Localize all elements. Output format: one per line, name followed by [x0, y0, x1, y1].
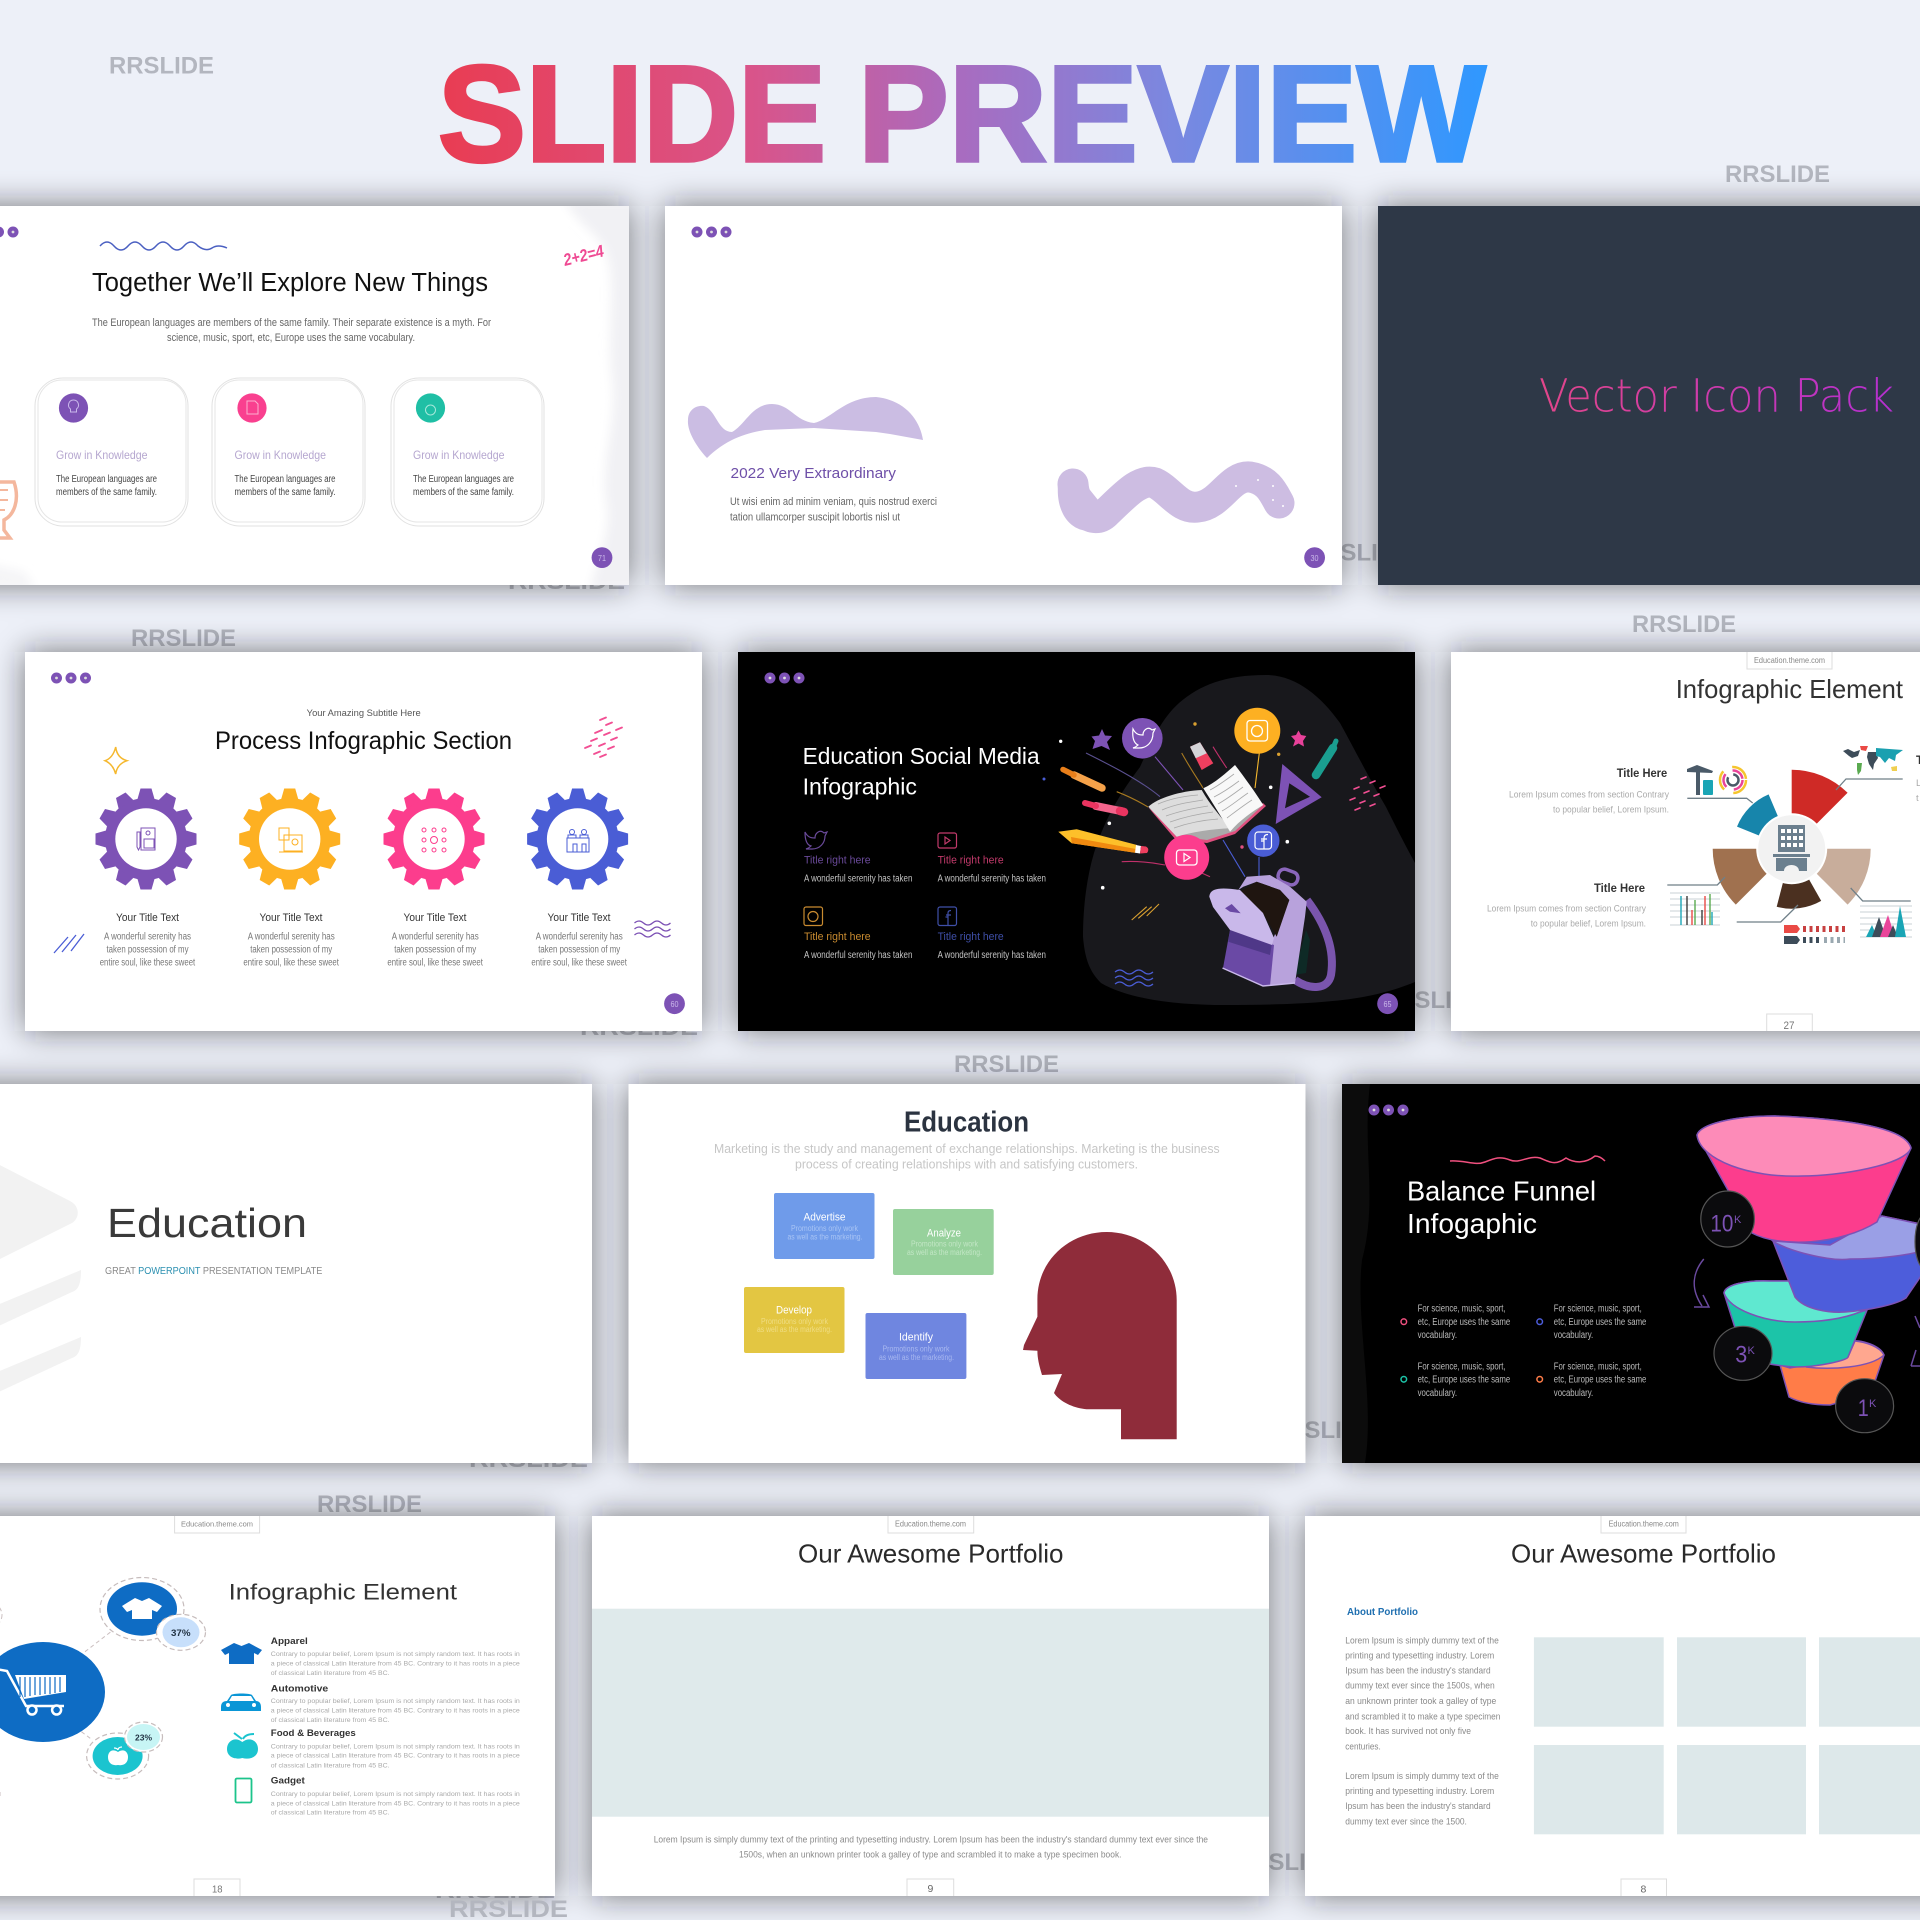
text block bottom left — [1487, 881, 1646, 930]
panel: slide Education head — [628, 1084, 1306, 1463]
text block 1: an unknown printer took a galley of type — [1345, 1696, 1496, 1707]
step 3 text: Your Title Text — [404, 912, 466, 924]
card 2: Grow in Knowledge — [234, 448, 326, 462]
row: Gadget: of classical Latin literature from 45 BC. — [271, 1810, 390, 1817]
heading: Balance Funnel — [1407, 1176, 1596, 1207]
page number: 8 — [1640, 1884, 1646, 1896]
step 1 text — [100, 912, 195, 969]
subtitle: GREAT POWERPOINT PRESENTATION TEMPLATE — [105, 1265, 322, 1277]
step 4 text — [531, 912, 627, 969]
item: youtube: A wonderful serenity has taken — [938, 874, 1046, 885]
text block top left — [1509, 766, 1669, 816]
page number — [1621, 1879, 1666, 1897]
box: Develop: as well as the marketing. — [757, 1325, 832, 1334]
step 2 text: entire soul, like these sweet — [243, 958, 339, 969]
box: Advertise — [774, 1193, 874, 1259]
list item 1: etc, Europe uses the same — [1418, 1317, 1511, 1328]
icon: social dots — [0, 226, 18, 238]
text block 1: Ipsum has been the industry's standard — [1345, 1665, 1491, 1676]
icon: building — [1773, 825, 1810, 871]
callout: 37% — [156, 1614, 206, 1650]
doodle: purple waves — [634, 921, 670, 937]
text block bottom left: to popular belief, Lorem Ipsum. — [1531, 919, 1646, 930]
item: instagram — [804, 931, 912, 961]
list item 1: For science, music, sport, — [1418, 1304, 1506, 1315]
text block 1: book. It has survived not only five — [1345, 1726, 1471, 1737]
icon: social dots — [51, 672, 91, 684]
heading: Infographic — [803, 774, 917, 800]
card 1: Grow in Knowledge — [56, 448, 148, 462]
heading: Our Awesome Portfolio — [798, 1538, 1064, 1568]
list item 1 — [1401, 1304, 1511, 1341]
item: twitter — [804, 854, 912, 885]
icon: twitter bubble — [1122, 718, 1163, 759]
row: Automotive: Contrary to popular belief, Lorem Ipsum is not simply random text. It has roots in — [271, 1698, 520, 1705]
icon: youtube bubble — [1164, 835, 1209, 880]
card 1: members of the same family. — [56, 487, 157, 498]
icon: world map — [1843, 746, 1903, 775]
text block 2: Lorem Ipsum is simply dummy text of the — [1345, 1771, 1499, 1782]
text block 1: centuries. — [1345, 1741, 1381, 1752]
wave decoration — [1450, 1156, 1605, 1163]
card 3 — [391, 378, 544, 526]
text block: science, music, sport, etc, Europe uses the same vocabulary. — [167, 332, 415, 344]
box: Develop: Promotions only work — [761, 1317, 829, 1326]
box: Analyze — [893, 1209, 994, 1275]
bubble: 3K: 3 — [1735, 1342, 1747, 1369]
row: Gadget: Gadget — [271, 1776, 305, 1786]
page number — [194, 1879, 240, 1897]
text block 2: printing and typesetting industry. Lorem — [1345, 1786, 1494, 1797]
gear: blue — [527, 788, 628, 890]
title — [438, 38, 1486, 191]
tab: Education.theme.com — [1609, 1520, 1679, 1529]
text block — [730, 496, 937, 524]
watermarks: RRSLIDE: RRSLIDE — [435, 1877, 555, 1904]
box: Analyze: Analyze — [927, 1227, 961, 1239]
bubble: 10K: 10 — [1710, 1211, 1733, 1238]
tab: Education.theme.com — [895, 1520, 966, 1529]
text block 2 — [1345, 1771, 1499, 1827]
icon: triangle ruler — [1276, 764, 1322, 824]
watermarks: RRSLIDE: RRSLIDE — [109, 52, 214, 80]
step 3 text: taken possession of my — [394, 945, 476, 956]
panel: slide Our Awesome Portfolio wide — [592, 1515, 1269, 1897]
tab — [175, 1515, 260, 1533]
page number — [664, 993, 685, 1014]
icon: pencil — [1058, 829, 1148, 854]
list item 4: For science, music, sport, — [1554, 1362, 1642, 1373]
text block bottom left: Lorem Ipsum comes from section Contrary — [1487, 904, 1646, 915]
bubble: 1K — [1836, 1379, 1894, 1433]
icon: ring — [1720, 767, 1746, 793]
text block 1: Lorem Ipsum is simply dummy text of the — [1345, 1635, 1499, 1646]
page number: 65 — [1384, 1000, 1392, 1009]
icon: head silhouette — [1023, 1232, 1177, 1439]
step 4 text: A wonderful serenity has — [536, 931, 623, 942]
step 2 text: A wonderful serenity has — [248, 931, 335, 942]
list item 2 — [1537, 1304, 1647, 1341]
page number — [1377, 993, 1398, 1014]
page number — [592, 547, 612, 568]
row: Food & Beverages: Food & Beverages — [271, 1728, 356, 1738]
item: twitter: Title right here — [804, 854, 871, 866]
icon: orange crayon — [1063, 770, 1102, 788]
arrow: left curved — [1694, 1259, 1709, 1307]
heading: Process Infographic Section — [215, 727, 512, 755]
box: Develop — [744, 1287, 844, 1353]
list item 1: vocabulary. — [1418, 1330, 1457, 1341]
step 2 text: Your Title Text — [260, 912, 322, 924]
step 3 text: entire soul, like these sweet — [387, 958, 483, 969]
box: Advertise: as well as the marketing. — [788, 1232, 862, 1241]
tab: Education.theme.com — [1754, 656, 1825, 665]
box: Identify: as well as the marketing. — [879, 1353, 954, 1362]
row: Gadget: a piece of classical Latin literature from 45 BC. Contrary to it has roots in a piece — [271, 1800, 520, 1807]
panel: slide Our Awesome Portfolio grid — [1305, 1515, 1920, 1897]
page number: 30 — [1310, 554, 1319, 563]
row: Apparel: Contrary to popular belief, Lorem Ipsum is not simply random text. It has roots in — [271, 1651, 520, 1658]
heading: Education — [904, 1107, 1029, 1139]
subtitle: Your Amazing Subtitle Here — [307, 708, 421, 718]
row: Automotive: of classical Latin literature from 45 BC. — [271, 1717, 390, 1724]
icon: cart circle — [0, 1642, 105, 1742]
item: youtube: Title right here — [938, 854, 1004, 866]
title: SLIDE — [438, 38, 826, 191]
icon: twitter outline — [805, 831, 827, 849]
step 4 text: entire soul, like these sweet — [531, 958, 627, 969]
icon: bar chart — [1670, 893, 1720, 925]
text block 1 — [1345, 1635, 1500, 1752]
step 4 text: taken possession of my — [538, 945, 620, 956]
text block: The European languages are members of the same family. Their separate existence is a myth. For — [92, 317, 491, 329]
bubble: 1K: K — [1869, 1398, 1877, 1410]
icon: people chart — [1784, 925, 1845, 944]
panel: slide Balance Funnel — [1342, 1084, 1920, 1463]
heading: 2022 Very Extraordinary — [730, 465, 897, 482]
wave decoration — [100, 242, 227, 250]
step 4 text: Your Title Text — [548, 912, 610, 924]
bubble: 10K — [1701, 1191, 1754, 1247]
list item 4: vocabulary. — [1554, 1388, 1593, 1399]
heading: Education Social Media — [803, 743, 1040, 769]
text block: process of creating relationships with and satisfying customers. — [795, 1157, 1138, 1172]
pie chart — [1713, 770, 1871, 909]
icon: facebook outline — [938, 907, 956, 926]
heading: Infographic Element — [1676, 674, 1904, 704]
row: Automotive: Automotive — [271, 1683, 328, 1693]
panel: slide 2022 Very Extraordinary — [665, 206, 1342, 585]
heading: Education — [107, 1200, 307, 1246]
page number — [907, 1879, 954, 1897]
watermarks: RRSLIDE: RRSLIDE — [1380, 987, 1485, 1014]
chevrons — [0, 1160, 81, 1396]
card 1: The European languages are — [56, 474, 157, 485]
dark blob — [1083, 675, 1415, 1005]
bubble: right, cut off — [1915, 1215, 1920, 1269]
box: Analyze: Promotions only work — [911, 1240, 979, 1249]
panel: slide Infographic Element pie — [1451, 651, 1920, 1032]
step 3 text: A wonderful serenity has — [392, 931, 479, 942]
watermarks: RRSLIDE: RRSLIDE — [317, 1491, 422, 1518]
page number: 9 — [928, 1883, 934, 1895]
list item 2: For science, music, sport, — [1554, 1304, 1642, 1315]
panel: slide Vector Icon Pack — [1378, 206, 1920, 585]
icon: teal crayon — [1316, 741, 1336, 775]
tab: Education.theme.com — [181, 1520, 253, 1529]
text block: 1500s, when an unknown printer took a galley of type and scrambled it to make a type specimen book. — [739, 1849, 1122, 1860]
list item 2: etc, Europe uses the same — [1554, 1317, 1647, 1328]
watermarks: RRSLIDE: RRSLIDE — [469, 1446, 588, 1473]
arrow: right curved — [1911, 1316, 1920, 1366]
watermarks: RRSLIDE: RRSLIDE — [131, 625, 236, 652]
card 2 — [212, 378, 365, 526]
dashed connectors — [0, 1599, 111, 1796]
step 1 text: Your Title Text — [116, 912, 179, 924]
icon: instagram bubble — [1234, 708, 1280, 754]
text block top left: to popular belief, Lorem Ipsum. — [1553, 805, 1669, 816]
text block: tation ullamcorper suscipit lobortis nisl ut — [730, 512, 900, 524]
box: Identify — [866, 1313, 966, 1379]
row: Gadget — [236, 1776, 520, 1817]
item: facebook — [938, 931, 1046, 961]
page number: 60 — [670, 1000, 679, 1009]
heading: Infographic Element — [229, 1579, 457, 1604]
text block top left: Title Here — [1617, 766, 1668, 780]
panel: slide Education Social Media Infographic — [738, 652, 1415, 1031]
doodle: 2+2=4: 2+2=4 — [561, 241, 606, 270]
bubble: 1K: 1 — [1858, 1395, 1869, 1422]
leader lines — [1667, 779, 1911, 922]
illustration: backpack — [1209, 867, 1332, 987]
text block right, cut off: t — [1916, 793, 1919, 804]
gear: pink — [384, 788, 484, 890]
row: Apparel: a piece of classical Latin literature from 45 BC. Contrary to it has roots in a piece — [271, 1660, 520, 1667]
text block 2: Ipsum has been the industry's standard — [1345, 1801, 1491, 1812]
box: Advertise: Advertise — [804, 1212, 846, 1224]
page number — [1767, 1014, 1812, 1032]
image placeholder grid — [1534, 1637, 1920, 1834]
panel: slide Process Infographic Section — [25, 652, 702, 1031]
icon: apple circle — [87, 1733, 149, 1779]
watermarks: RRSLIDE: RRSLIDE — [1270, 1417, 1375, 1444]
row: Food & Beverages: a piece of classical Latin literature from 45 BC. Contrary to it has roots in a piece — [271, 1753, 520, 1760]
list item 3: vocabulary. — [1418, 1388, 1457, 1399]
panel: slide Together We'll Explore New Things — [0, 200, 640, 590]
panel: slide Infographic Element shopping — [0, 1515, 555, 1897]
heading — [803, 743, 1040, 800]
connector lines — [1086, 747, 1259, 883]
icon: social dots — [1368, 1104, 1408, 1116]
icon: pink crayon — [1085, 803, 1124, 812]
step 2 text: taken possession of my — [250, 945, 332, 956]
card 3: Grow in Knowledge — [413, 448, 505, 462]
heading: Together We’ll Explore New Things — [92, 269, 488, 297]
icon: star outline — [105, 747, 127, 774]
funnel — [1697, 1116, 1920, 1405]
item: facebook: A wonderful serenity has taken — [938, 950, 1046, 961]
list item 4 — [1537, 1362, 1647, 1399]
doodles — [1115, 777, 1385, 986]
blob top — [688, 397, 923, 458]
row: Food & Beverages: of classical Latin literature from 45 BC. — [271, 1762, 390, 1769]
icons: decorative stars — [1042, 722, 1306, 890]
card 2: The European languages are — [234, 474, 336, 485]
page number — [1304, 547, 1325, 568]
icon: crane — [1687, 765, 1713, 795]
heading: Our Awesome Portfolio — [1511, 1538, 1776, 1568]
watermarks: RRSLIDE: RRSLIDE — [954, 1051, 1059, 1078]
icon: instagram outline — [804, 907, 822, 926]
list item 4: etc, Europe uses the same — [1554, 1375, 1647, 1386]
text block — [714, 1141, 1220, 1172]
list item 2: vocabulary. — [1554, 1330, 1593, 1341]
text block 2: dummy text ever since the 1500. — [1345, 1816, 1467, 1827]
box: Develop: Develop — [776, 1304, 812, 1316]
box: Analyze: as well as the marketing. — [907, 1248, 982, 1257]
step 1 text: entire soul, like these sweet — [100, 958, 195, 969]
item: youtube — [938, 854, 1046, 885]
row: Food & Beverages: Contrary to popular belief, Lorem Ipsum is not simply random text. It has roots in — [271, 1743, 520, 1750]
step 1 text: taken possession of my — [106, 945, 188, 956]
item: instagram: A wonderful serenity has taken — [804, 950, 912, 961]
icon: eraser — [1190, 742, 1213, 770]
blob wave — [1058, 470, 1284, 531]
icon: social dots — [764, 672, 804, 684]
watermarks: RRSLIDE: RRSLIDE — [1725, 161, 1830, 188]
row: Gadget: Contrary to popular belief, Lorem Ipsum is not simply random text. It has roots in — [271, 1791, 520, 1798]
list item 3: For science, music, sport, — [1418, 1362, 1506, 1373]
text block 1: and scrambled it to make a type specimen — [1345, 1711, 1500, 1722]
icon: youtube outline — [938, 833, 956, 848]
icon: trophy — [0, 482, 16, 538]
text block bottom left: Title Here — [1594, 881, 1645, 895]
row: Apparel: Apparel — [271, 1636, 308, 1646]
callout: 23% — [124, 1722, 162, 1752]
row: Automotive: a piece of classical Latin literature from 45 BC. Contrary to it has roots in a piece — [271, 1707, 520, 1714]
tab — [1747, 651, 1832, 669]
title: PREVIEW — [858, 38, 1486, 191]
watermarks: RRSLIDE: RRSLIDE — [580, 1014, 698, 1041]
card 2: members of the same family. — [234, 487, 336, 498]
page number: 18 — [212, 1884, 223, 1896]
row: Apparel — [221, 1636, 520, 1677]
card 1 — [35, 378, 188, 526]
image placeholder band — [592, 1609, 1269, 1817]
item: twitter: A wonderful serenity has taken — [804, 874, 912, 885]
text block 1: dummy text ever since the 1500s, when — [1345, 1681, 1495, 1692]
illustration: book — [1148, 765, 1266, 843]
gear: yellow — [239, 788, 340, 890]
doodle: pink dashes — [585, 718, 622, 757]
icon: facebook bubble — [1247, 824, 1280, 857]
panel: slide Education cover — [0, 1084, 592, 1463]
text block: Lorem Ipsum is simply dummy text of the printing and typesetting industry. Lorem Ipsum has been the industry's standard dummy text ever since the — [654, 1835, 1208, 1846]
heading: Vector Icon Pack — [1539, 369, 1894, 422]
box: Advertise: Promotions only work — [791, 1224, 859, 1233]
callout: 23%: 23% — [135, 1734, 152, 1742]
icon: shirt circle — [100, 1578, 184, 1640]
row: Apparel: of classical Latin literature from 45 BC. — [271, 1670, 390, 1677]
icon: area chart — [1860, 906, 1912, 937]
heading — [1407, 1176, 1596, 1239]
subheading: About Portfolio — [1347, 1607, 1418, 1618]
text block — [92, 317, 491, 344]
callout: 37%: 37% — [171, 1628, 190, 1638]
tab — [888, 1515, 974, 1533]
watermarks: RRSLIDE: RRSLIDE — [1306, 540, 1411, 566]
card 3: The European languages are — [413, 474, 514, 485]
bubble: 10K: K — [1734, 1214, 1742, 1226]
item: facebook: Title right here — [938, 931, 1004, 943]
bubble: 3K: K — [1748, 1345, 1756, 1357]
text block 1: printing and typesetting industry. Lorem — [1345, 1650, 1494, 1661]
text block top left: Lorem Ipsum comes from section Contrary — [1509, 790, 1669, 801]
card 3: members of the same family. — [413, 487, 514, 498]
watermarks: RRSLIDE: RRSLIDE — [1632, 611, 1736, 638]
bubble: 3K — [1714, 1326, 1772, 1380]
page number: 71 — [598, 554, 606, 563]
tab — [1601, 1515, 1686, 1533]
box: Identify: Identify — [899, 1332, 933, 1344]
step 3 text — [387, 912, 483, 969]
list item 3: etc, Europe uses the same — [1418, 1375, 1511, 1386]
list item 3 — [1401, 1362, 1511, 1399]
gear: purple — [96, 788, 196, 890]
icon: social dots — [692, 226, 732, 238]
step 1 text: A wonderful serenity has — [104, 931, 191, 942]
text block: Ut wisi enim ad minim veniam, quis nostrud exerci — [730, 496, 937, 508]
row: Automotive — [221, 1683, 520, 1724]
watermarks: RRSLIDE: RRSLIDE — [1234, 1849, 1339, 1876]
item: instagram: Title right here — [804, 931, 871, 943]
text block — [654, 1835, 1208, 1860]
box: Identify: Promotions only work — [882, 1345, 950, 1354]
step 2 text — [243, 912, 339, 969]
page number: 27 — [1784, 1020, 1794, 1032]
text block right, cut off — [1916, 753, 1920, 804]
row: Food & Beverages — [227, 1728, 520, 1769]
text block: Marketing is the study and management of exchange relationships. Marketing is the business — [714, 1141, 1220, 1156]
doodle: blue slashes — [54, 934, 84, 953]
watermarks: RRSLIDE: RRSLIDE — [508, 568, 625, 595]
heading: Infogaphic — [1407, 1208, 1537, 1239]
